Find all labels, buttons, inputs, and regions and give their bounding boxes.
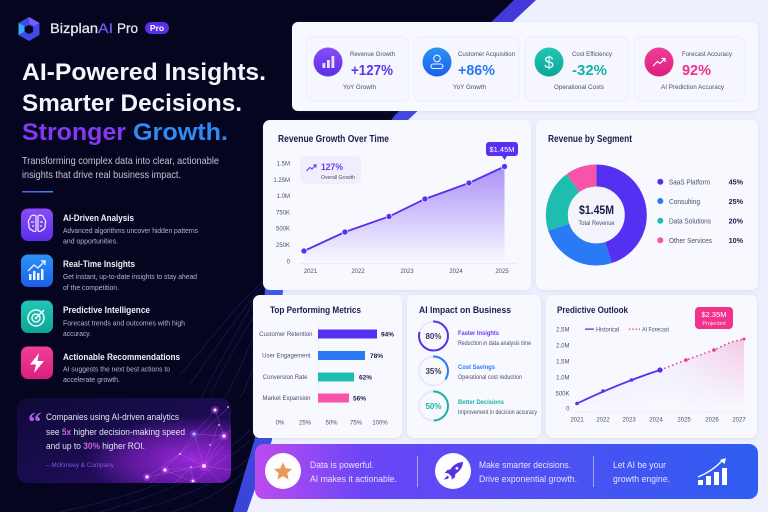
metric ring: cost savings [419, 356, 522, 386]
y axis labels: 2.5M [556, 328, 570, 334]
banner text 3 [613, 460, 670, 484]
KPI: revenue growth [306, 36, 409, 102]
KPI: forecast accuracy: AI Prediction Accuracy [661, 84, 725, 91]
x axis labels: 2025 [495, 269, 509, 275]
KPI: cost efficiency: Operational Costs [554, 84, 605, 91]
callout: value tooltip: $1.45M [489, 145, 515, 154]
quote text: and up to 30% higher ROI. [46, 441, 145, 451]
banner text 1 [310, 460, 397, 484]
feature: Predictive Intelligence: accuracy. [63, 329, 91, 338]
feature: Predictive Intelligence: Forecast trends and outcomes with high [63, 318, 185, 328]
y axis labels: 500K [276, 226, 290, 232]
panel: revenue by segment [536, 120, 758, 290]
bar chart: Conversion Rate [263, 375, 308, 381]
icon: brain [21, 208, 53, 241]
x axis labels [570, 418, 746, 424]
donut chart: Total Revenue [578, 221, 615, 227]
KPI: revenue growth: +127% [351, 62, 393, 79]
title: Growth. [133, 119, 228, 146]
metric ring: cost savings: 35% [425, 367, 442, 376]
icon: rocket [435, 453, 471, 489]
KPI: customer acquisition: +86% [458, 62, 495, 79]
title [22, 59, 266, 146]
icon: dollar: $ [544, 53, 554, 72]
area line chart [301, 164, 508, 263]
banner text 1: AI makes it actionable. [310, 474, 397, 484]
banner text 3: Let AI be your [613, 460, 666, 470]
callout: overall growth [300, 156, 361, 184]
y axis labels: 1.5M [556, 360, 570, 366]
bar chart [259, 330, 394, 402]
banner text 2 [479, 460, 577, 484]
y axis labels: 750K [276, 210, 290, 216]
KPI: forecast accuracy [634, 36, 745, 102]
quote text: Companies using AI-driven analytics [46, 412, 180, 422]
metric ring: faster insights: 80% [425, 332, 442, 341]
banner [255, 444, 758, 499]
x axis labels: 2021 [570, 418, 584, 424]
x axis labels: 25% [299, 420, 312, 426]
legend: 10% [729, 236, 744, 245]
decorative lines [60, 280, 265, 512]
feature: Real-Time Insights: of the competition. [63, 283, 119, 292]
y axis labels: 500K [555, 392, 570, 398]
KPI: forecast accuracy: Forecast Accuracy [682, 51, 733, 58]
feature: Real-Time Insights: Get instant, up-to-date insights to stay ahead [63, 272, 197, 281]
heading: Predictive Outlook [557, 305, 629, 316]
banner text 1: Data is powerful. [310, 460, 374, 470]
bar chart: 94% [381, 332, 394, 338]
x axis labels: 2026 [705, 418, 719, 424]
heading: Revenue by Segment [548, 133, 632, 145]
legend: AI Forecast [642, 328, 669, 334]
banner text 3: growth engine. [613, 474, 670, 484]
bar chart: User Engagement [262, 354, 311, 360]
KPI: forecast accuracy: 92% [682, 62, 711, 79]
dark left panel [0, 0, 514, 512]
metric ring: faster insights: Faster Insights [458, 330, 499, 337]
x axis labels: 100% [372, 420, 388, 426]
feature: Actionable Recommendations [21, 346, 180, 384]
x axis labels [304, 269, 509, 275]
text block: Actionable Recommendations [63, 352, 180, 363]
title: AI-Powered Insights. [22, 59, 266, 86]
callout: overall growth: 127% [321, 162, 343, 173]
icon: logo hexagon [18, 17, 40, 41]
y axis labels [555, 328, 570, 412]
bar chart: 78% [370, 353, 383, 360]
heading: Revenue Growth Over Time [278, 133, 389, 145]
KPI: revenue growth: Revenue Growth [350, 51, 395, 58]
legend [657, 178, 744, 245]
quote text [46, 412, 185, 451]
KPI: customer acquisition [414, 36, 519, 102]
KPI: cost efficiency: -32% [572, 62, 607, 79]
legend: Other Services [669, 236, 712, 245]
banner text 2: Make smarter decisions. [479, 460, 571, 470]
bar chart: Market Expansion [262, 396, 310, 402]
text block: Predictive Intelligence [63, 305, 150, 316]
y axis labels: 250K [276, 243, 290, 249]
x axis labels: 2022 [351, 269, 365, 275]
icon: bars [314, 48, 342, 76]
bar chart: 62% [359, 374, 372, 382]
bar chart: Customer Retention [259, 332, 312, 338]
callout: projected value: $2.35M [701, 310, 727, 319]
x axis labels: 2021 [304, 269, 318, 275]
legend: Consulting [669, 197, 700, 206]
metric ring: better decisions: Better Decisions [458, 399, 504, 406]
legend: SaaS Platform [669, 178, 710, 186]
donut chart [557, 176, 636, 254]
metric ring: better decisions: Improvement in decision accuracy [458, 410, 537, 416]
logo [18, 17, 169, 41]
panel: revenue growth over time [263, 120, 531, 290]
network graphic [143, 406, 231, 484]
title: Smarter Decisions. [22, 90, 242, 117]
y axis labels: 0 [287, 260, 291, 266]
metric ring: faster insights: Reduction in data analysis time [458, 341, 532, 347]
y axis labels: 1.25M [273, 178, 290, 184]
pro badge: Pro [150, 23, 164, 33]
KPI: customer acquisition: Customer Acquisition [458, 51, 515, 58]
x axis labels: 2022 [596, 418, 610, 424]
x axis labels: 2027 [732, 418, 746, 424]
KPI: cost efficiency [525, 36, 629, 102]
x axis labels: 2024 [449, 269, 463, 275]
panel: top performing metrics [253, 295, 402, 438]
callout: projected value [695, 307, 733, 329]
icon: person [422, 48, 452, 76]
icon: lightning [21, 346, 53, 379]
y axis labels: 1.5M [277, 162, 290, 168]
y axis labels [273, 162, 291, 266]
legend: Data Solutions [669, 216, 711, 226]
heading: Top Performing Metrics [270, 305, 361, 316]
feature: Predictive Intelligence [21, 300, 185, 338]
y axis labels: 2.0M [556, 344, 570, 350]
icon: star [265, 453, 301, 489]
KPI: revenue growth: YoY Growth [343, 84, 376, 91]
x axis labels: 75% [350, 420, 363, 426]
blue diagonal band [220, 0, 536, 512]
bar chart: 56% [353, 396, 366, 402]
x axis labels: 50% [325, 420, 338, 426]
metric ring: cost savings: Operational cost reduction [458, 375, 522, 381]
metric ring: better decisions: 50% [425, 402, 442, 411]
feature: Actionable Recommendations: accelerate growth. [63, 375, 120, 384]
metric ring: better decisions [419, 392, 537, 420]
x axis labels: 0% [276, 420, 285, 426]
banner text 2: Drive exponential growth. [479, 474, 577, 484]
panel: KPI row [292, 22, 758, 111]
x axis labels: 2024 [649, 418, 663, 424]
metric ring: faster insights [419, 322, 532, 350]
text block: Real-Time Insights [63, 259, 135, 270]
feature: AI-Driven Analysis: Advanced algorithms uncover hidden patterns [63, 226, 198, 235]
legend [585, 328, 669, 334]
donut chart: $1.45M [579, 203, 614, 217]
legend: 45% [729, 178, 744, 186]
y axis labels: 0 [566, 406, 570, 412]
title: Stronger [22, 119, 126, 146]
panel: predictive outlook [546, 295, 757, 438]
legend: 20% [729, 216, 744, 226]
heading: AI Impact on Business [419, 305, 511, 316]
x axis labels: 2023 [400, 269, 414, 275]
subtitle [22, 155, 219, 181]
callout: overall growth: Overall Growth [321, 175, 355, 181]
panel: quote [17, 398, 231, 484]
logo: Pro [117, 20, 138, 36]
subtitle: insights that drive real business impact. [22, 169, 181, 181]
feature: AI-Driven Analysis: and opportunities. [63, 236, 118, 246]
brand name: Bizplan [50, 20, 98, 36]
icon: trend arrow [644, 48, 674, 76]
feature: Real-Time Insights [21, 254, 197, 292]
quote source: – McKinsey & Company [46, 462, 115, 469]
subtitle: Transforming complex data into clear, actionable [22, 155, 219, 167]
pro badge [145, 22, 169, 34]
panel: AI impact on business [407, 295, 541, 438]
x axis labels [276, 420, 388, 426]
y axis labels: 1.0M [556, 376, 570, 382]
logo: AI [98, 20, 113, 36]
icon: target [21, 300, 53, 333]
legend: 25% [729, 197, 744, 206]
KPI: cost efficiency: Cost Efficiency [572, 51, 613, 58]
forecast line chart [575, 338, 746, 411]
feature: Actionable Recommendations: AI suggests the next best actions to [63, 364, 170, 374]
KPI: customer acquisition: YoY Growth [453, 84, 486, 91]
text block: AI-Driven Analysis [63, 213, 134, 224]
callout: projected value: Projected [702, 321, 726, 327]
y axis labels: 1.0M [277, 194, 290, 200]
icon: quote mark: “ [28, 407, 42, 437]
icon: growth bars [698, 458, 727, 485]
legend: Historical [596, 328, 619, 334]
x axis labels: 2025 [677, 418, 691, 424]
metric ring: cost savings: Cost Savings [458, 364, 495, 371]
callout: value tooltip [486, 142, 518, 160]
feature: AI-Driven Analysis [21, 208, 198, 246]
icon: rising chart [21, 254, 53, 287]
quote text: see 5x higher decision-making speed [46, 427, 185, 437]
x axis labels: 2023 [622, 418, 636, 424]
